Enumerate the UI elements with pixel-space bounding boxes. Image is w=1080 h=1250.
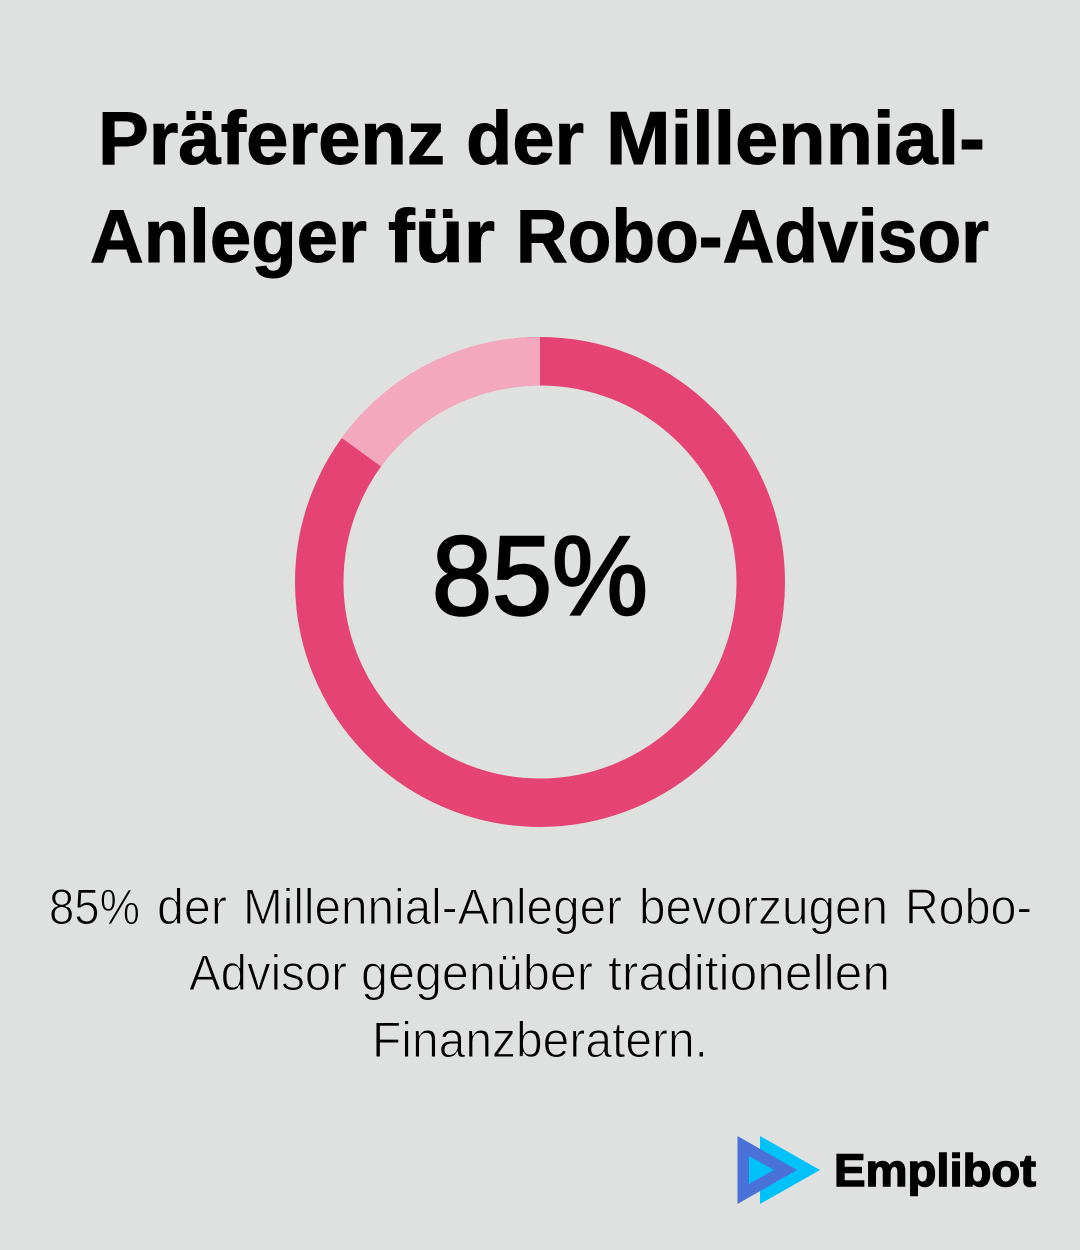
- title: für: [388, 194, 495, 278]
- description text: Advisor: [189, 945, 347, 1001]
- donut chart: 85%: [319, 361, 761, 803]
- description text: traditionellen: [608, 945, 890, 1001]
- title: der: [466, 96, 584, 180]
- description text: [49, 879, 1032, 1068]
- description text: Finanzberatern.: [372, 1012, 708, 1068]
- title: [90, 96, 989, 278]
- logo wordmark: Emplibot: [834, 1145, 1036, 1196]
- title: Präferenz: [98, 96, 445, 180]
- icon: play triangles: [738, 1136, 820, 1204]
- description text: 85%: [49, 879, 140, 935]
- description text: Robo-: [905, 879, 1032, 935]
- description text: Millennial-Anleger: [243, 879, 622, 935]
- title: Anleger: [90, 194, 367, 278]
- title: Robo-Advisor: [516, 194, 989, 278]
- description text: gegenüber: [361, 945, 593, 1001]
- logo: Emplibot: [738, 1136, 1036, 1204]
- description text: der: [157, 879, 227, 935]
- title: Millennial-: [606, 96, 985, 180]
- donut value: 85%: [432, 514, 648, 638]
- description text: bevorzugen: [639, 879, 888, 935]
